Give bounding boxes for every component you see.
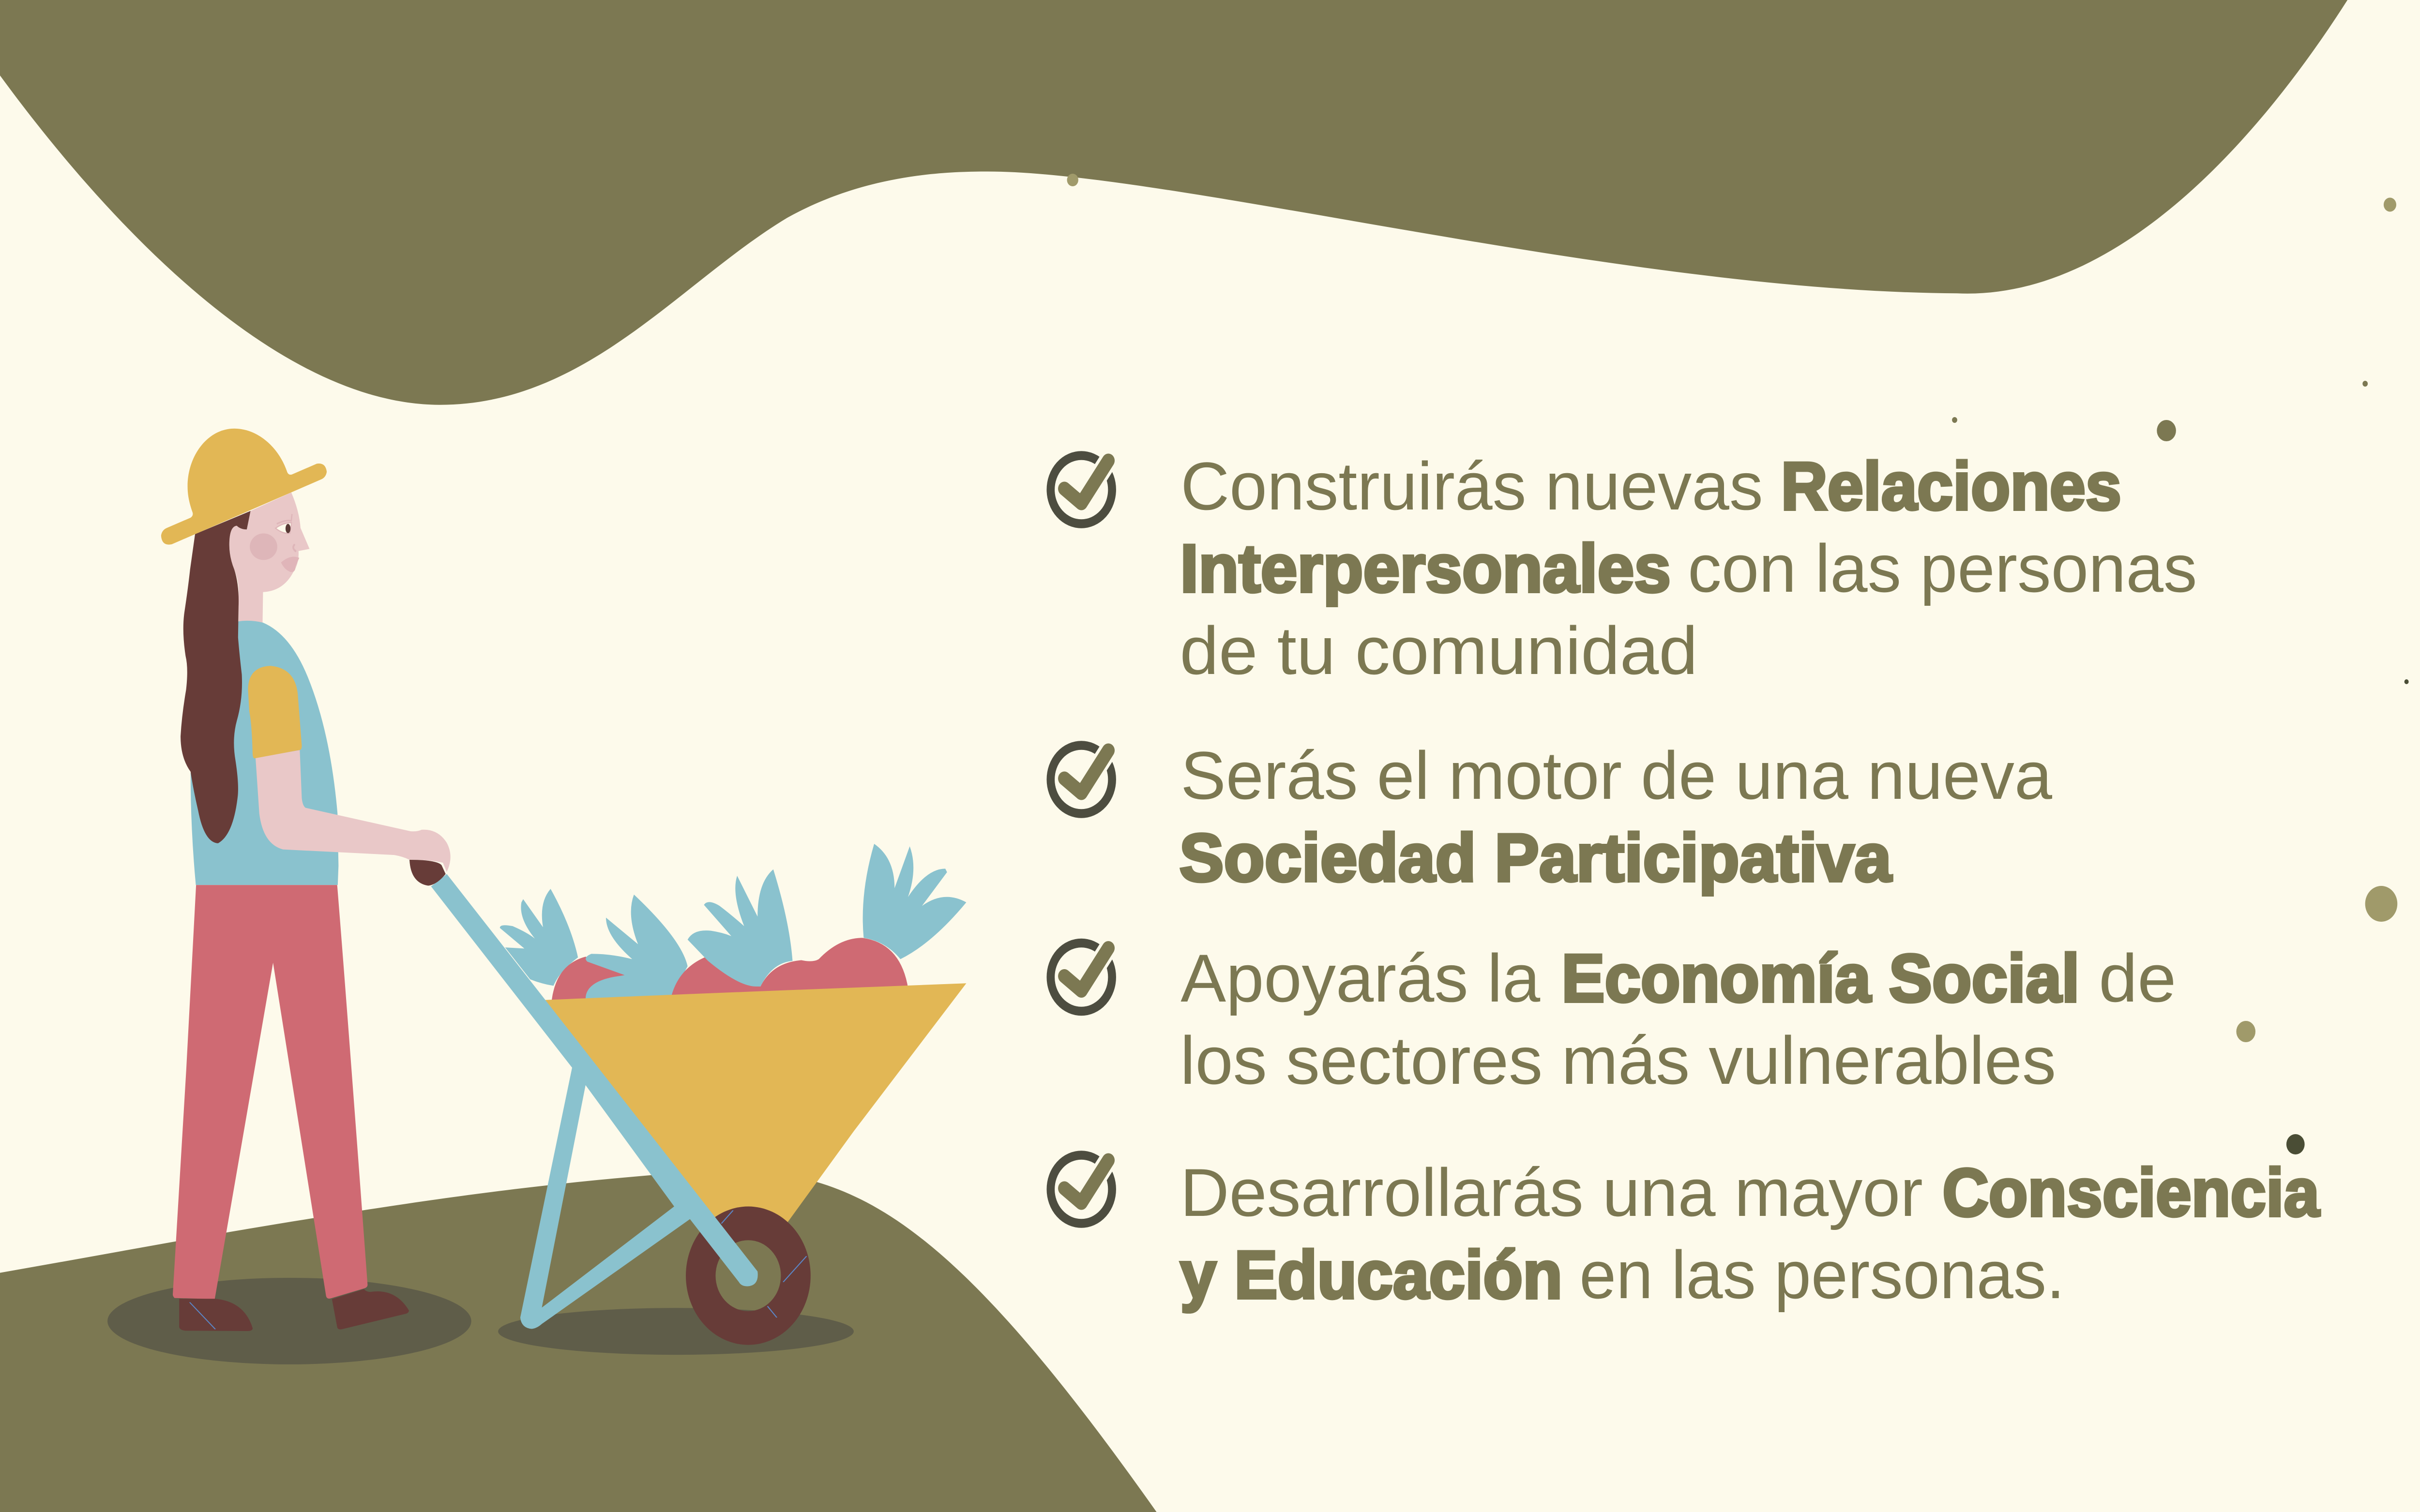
line 1: Construirás nuevas <box>1180 449 1763 524</box>
line 1: de <box>2099 941 2176 1016</box>
icon: check 1 <box>1051 448 1116 524</box>
wheelbarrow bed <box>537 983 966 1224</box>
line 1 <box>1180 1155 2320 1230</box>
beets and leaves <box>500 844 966 1000</box>
line 2 <box>1180 1237 2065 1313</box>
line 3: de tu comunidad <box>1180 613 1698 689</box>
line 1: Serás el motor de una nueva <box>1180 738 2053 813</box>
ground olive blob <box>0 1172 1161 1512</box>
text block: item 2 <box>1180 738 2053 896</box>
line 1: Apoyarás la <box>1180 941 1541 1016</box>
woman legs and shoes <box>173 885 409 1331</box>
line 1 <box>1180 449 2121 524</box>
shadow under wheelbarrow <box>498 1308 854 1355</box>
line 1 <box>1180 941 2176 1016</box>
woman upper body <box>161 429 451 885</box>
line 2: en las personas. <box>1579 1237 2065 1313</box>
wheel <box>686 1207 811 1345</box>
top olive blob <box>0 0 2347 405</box>
icon: check 2 <box>1051 738 1116 814</box>
line 2: Sociedad Participativa <box>1180 820 1892 896</box>
text block: item 1 <box>1180 449 2197 689</box>
wheelbarrow handle <box>431 874 758 1287</box>
icon: check 4 <box>1051 1148 1116 1223</box>
woman face details <box>250 514 299 572</box>
wheelbarrow frame <box>520 1067 699 1329</box>
line 2: con las personas <box>1688 531 2197 606</box>
line 1: Consciencia <box>1942 1155 2320 1230</box>
shadow under woman <box>107 1278 471 1364</box>
line 2: Interpersonales <box>1180 531 1671 606</box>
line 1: Desarrollarás una mayor <box>1180 1155 1923 1230</box>
icon: check 3 <box>1051 936 1116 1011</box>
decorative dots <box>1067 174 2409 1191</box>
illustration: wheelbarrow with beets <box>409 844 966 1345</box>
line 2: y Educación <box>1180 1237 1562 1313</box>
line 1: Relaciones <box>1781 449 2121 524</box>
line 2 <box>1180 531 2197 606</box>
line 1: Economía Social <box>1561 941 2080 1016</box>
text block: item 4 <box>1180 1155 2320 1313</box>
hand grip <box>409 860 446 886</box>
text block: item 3 <box>1180 941 2176 1098</box>
line 2: los sectores más vulnerables <box>1180 1023 2056 1098</box>
woman hat <box>161 429 327 545</box>
illustration: woman <box>161 429 451 1331</box>
